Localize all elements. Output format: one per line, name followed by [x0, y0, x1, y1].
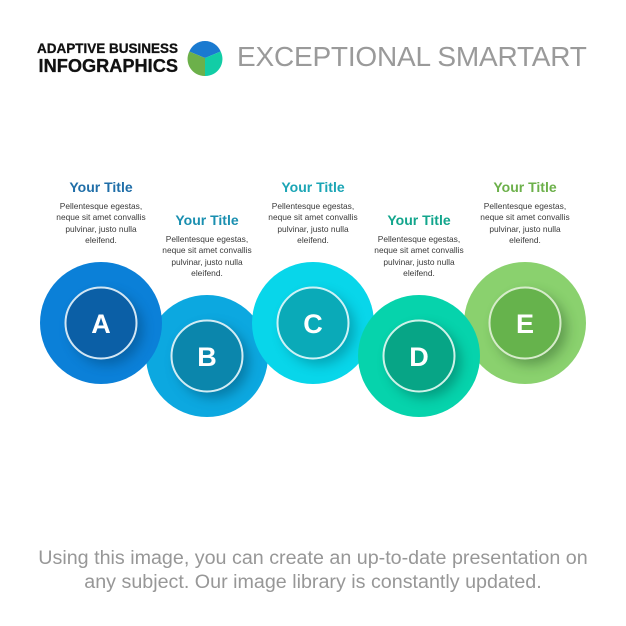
text block: B: Pellentesque egestas,: [166, 234, 248, 244]
text block: A: [56, 179, 146, 245]
circle B: [146, 295, 268, 417]
text block: A: pulvinar, justo nulla: [65, 224, 137, 234]
text block: E: [480, 179, 570, 245]
circle E: E: [516, 309, 534, 339]
circle D: [358, 295, 480, 417]
text block: A: Your Title: [69, 179, 133, 195]
text block: C: [268, 179, 358, 245]
brand name: [37, 41, 178, 76]
chart: overlapping circles: [40, 262, 586, 417]
text block: D: Pellentesque egestas,: [378, 234, 460, 244]
text block: C: Your Title: [281, 179, 345, 195]
text block: E: Your Title: [493, 179, 557, 195]
circle A: [40, 262, 162, 384]
text block: D: eleifend.: [403, 268, 435, 278]
circle A: A: [91, 309, 111, 339]
circle B: B: [197, 342, 217, 372]
text block: E: pulvinar, justo nulla: [489, 224, 561, 234]
text block: C: pulvinar, justo nulla: [277, 224, 349, 234]
footer text: [38, 546, 588, 593]
icon: logo pie: [188, 41, 222, 76]
circle E: [464, 262, 586, 384]
text block: B: neque sit amet convallis: [162, 245, 252, 255]
text block: B: Your Title: [175, 212, 239, 228]
brand name: ADAPTIVE BUSINESS: [37, 41, 178, 56]
heading: EXCEPTIONAL SMARTART: [237, 41, 587, 72]
circle D: D: [409, 342, 429, 372]
footer text: any subject. Our image library is constantly updated.: [84, 571, 542, 593]
circle C: C: [303, 309, 323, 339]
text block: E: eleifend.: [509, 235, 541, 245]
text block: E: Pellentesque egestas,: [484, 201, 566, 211]
text block: A: neque sit amet convallis: [56, 212, 146, 222]
text block: D: pulvinar, justo nulla: [383, 257, 455, 267]
text block: A: eleifend.: [85, 235, 117, 245]
brand name: INFOGRAPHICS: [39, 56, 178, 76]
text block: C: eleifend.: [297, 235, 329, 245]
text block: A: Pellentesque egestas,: [60, 201, 142, 211]
text block: E: neque sit amet convallis: [480, 212, 570, 222]
circle C: [252, 262, 374, 384]
text block: D: [374, 212, 464, 278]
text block: D: Your Title: [387, 212, 451, 228]
text block: D: neque sit amet convallis: [374, 245, 464, 255]
text block: B: pulvinar, justo nulla: [171, 257, 243, 267]
text block: C: Pellentesque egestas,: [272, 201, 354, 211]
footer text: Using this image, you can create an up-to-date presentation on: [38, 546, 588, 568]
text block: B: [162, 212, 252, 278]
text block: B: eleifend.: [191, 268, 223, 278]
text block: C: neque sit amet convallis: [268, 212, 358, 222]
